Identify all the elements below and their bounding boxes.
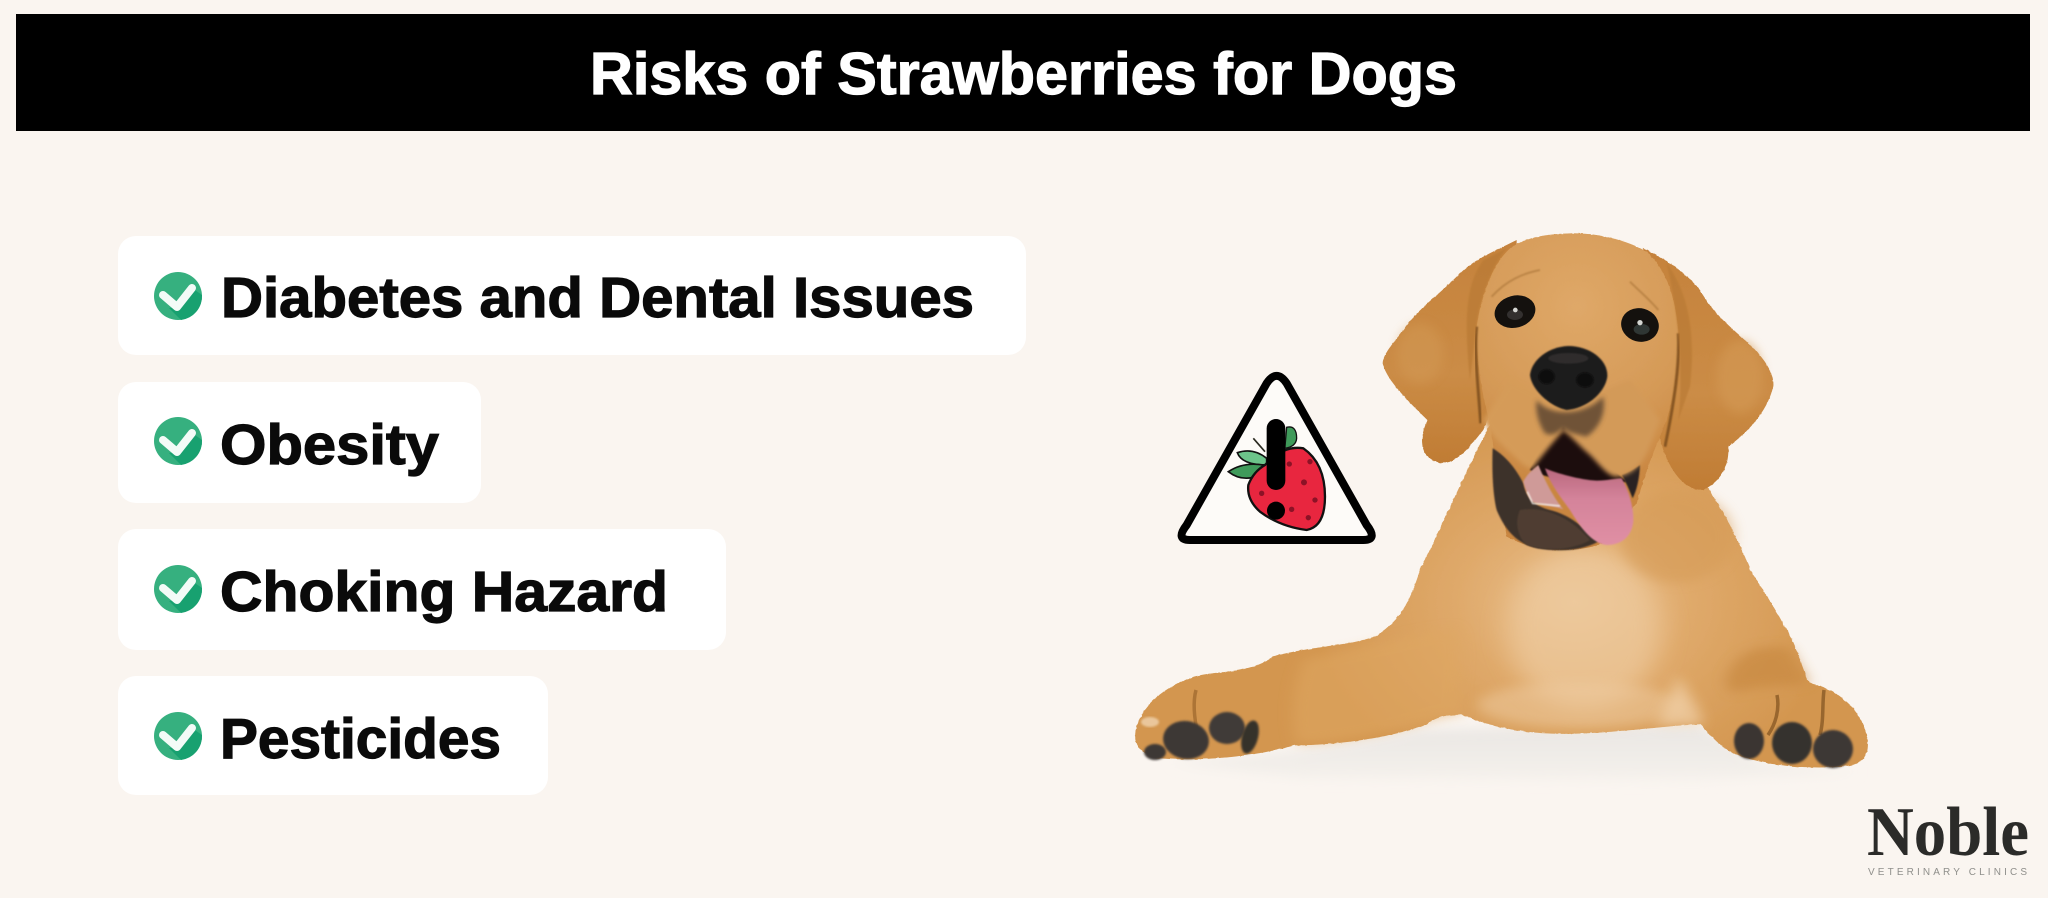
risk item: pesticides (118, 676, 548, 795)
skull and cheeks (1477, 233, 1679, 550)
snout shadow (1536, 397, 1604, 437)
chest highlight (1508, 548, 1661, 709)
risk item: choking hazard (118, 529, 726, 650)
right ear (1633, 248, 1773, 490)
ear crease lines (1476, 327, 1481, 423)
inner right leg highlight (1656, 675, 1702, 726)
gums and teeth (1523, 465, 1563, 509)
brow creases (1492, 270, 1658, 310)
tongue (1545, 468, 1633, 545)
right eye (1617, 304, 1663, 346)
left ear highlight (1397, 323, 1443, 383)
left eye (1491, 291, 1539, 332)
panel: risk list (118, 236, 1026, 795)
left leg shading (1293, 629, 1462, 743)
title: Risks of Strawberries for Dogs (590, 41, 1457, 107)
right front paw (1734, 690, 1853, 768)
icon: strawberry warning triangle (1182, 376, 1372, 540)
risk item: pesticides: Pesticides (220, 707, 501, 771)
logo: Noble Veterinary Clinics: Noble (1867, 794, 2029, 871)
right leg shading (1725, 647, 1809, 694)
title banner (16, 14, 2030, 131)
right ear highlight (1717, 340, 1763, 413)
logo: Noble Veterinary Clinics: VETERINARY CLINICS (1868, 867, 2027, 878)
head (1383, 233, 1773, 550)
risk item: obesity: Obesity (220, 413, 439, 477)
lower lip (1517, 509, 1590, 549)
risk item: choking hazard: Choking Hazard (220, 560, 668, 624)
nose (1530, 346, 1607, 410)
left ear (1383, 240, 1517, 463)
mouth corner (1622, 465, 1640, 498)
risk item: obesity (118, 382, 481, 503)
shoulder shading (1620, 491, 1733, 583)
upper lip right flew (1563, 380, 1660, 477)
risk item: diabetes and dental issues (118, 236, 1026, 355)
head fur silhouette (1383, 233, 1773, 550)
jaw (1492, 448, 1598, 550)
mouth opening (1530, 427, 1627, 483)
upper lip left flew (1483, 380, 1563, 468)
left front paw (1141, 690, 1262, 763)
illustration: puppy (1135, 233, 1868, 780)
ear inner shade (1467, 248, 1507, 380)
body (1135, 391, 1868, 767)
risk item: diabetes and dental issues: Diabetes and Dental Issues (221, 266, 974, 330)
floor shadow (1170, 725, 1860, 780)
